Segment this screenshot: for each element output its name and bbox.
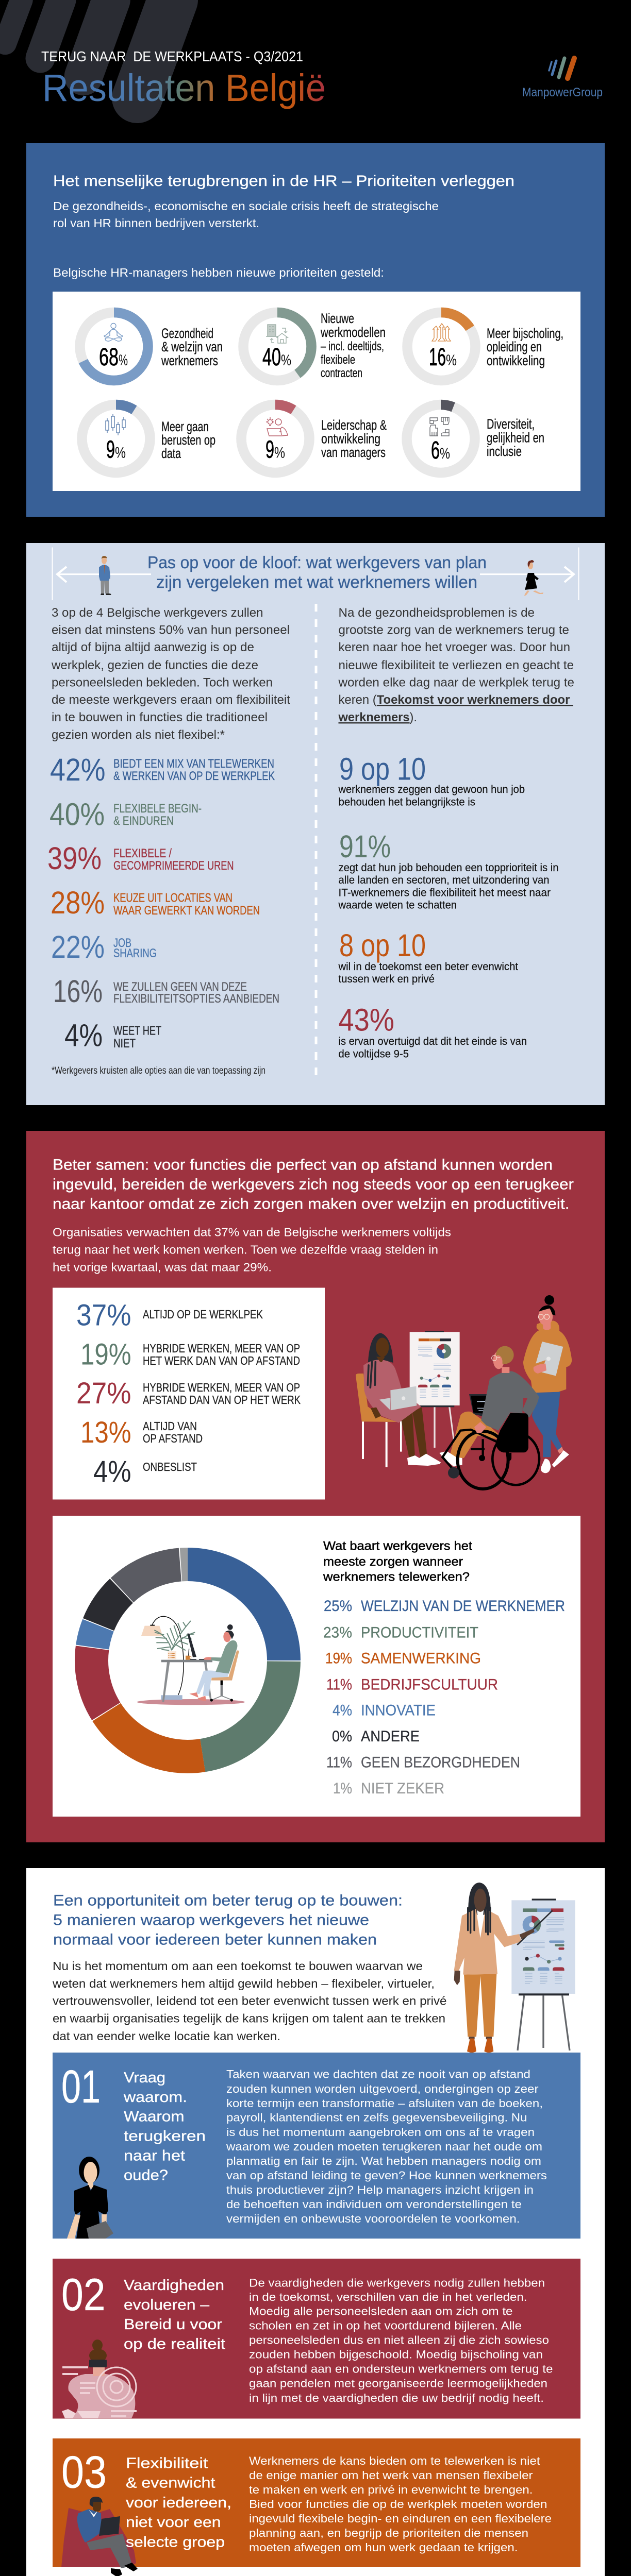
label: diversiteit: inclusie: [487, 444, 522, 459]
card heading: evolueren –: [124, 2297, 210, 2313]
label: leiderschap: van managers: [321, 445, 386, 460]
text: werknemers: worden elke dag naar de werkplek terug te: [338, 676, 574, 689]
stat: 43%: is ervan overtuigd dat dit het einde is van: [338, 1036, 527, 1047]
legend: 19%: [325, 1650, 352, 1667]
card body: gaan pendelen met georganiseerde leermogelijkheden: [249, 2377, 547, 2389]
intro text: rol van HR binnen bedrijven versterkt.: [53, 216, 259, 230]
stat: 40%: 40%: [49, 796, 105, 832]
illustration: team meeting: [356, 1295, 572, 1489]
legend: 11%: [326, 1676, 352, 1693]
card body: van op afstand leiding te geven? Hoe kunnen werknemers: [226, 2169, 547, 2182]
legend: PRODUCTIVITEIT: [361, 1624, 478, 1641]
text: werknemers: [338, 606, 574, 724]
text: werknemers: Na de gezondheidsproblemen is de: [338, 606, 535, 620]
label: nieuwe werkmodellen: werkmodellen: [320, 325, 386, 340]
text: werkgevers: personeelsleden bekleden. Toch werken: [52, 676, 273, 689]
card body: [249, 2276, 553, 2404]
header: [0, 0, 603, 109]
row: 27%: 27%: [76, 1377, 131, 1410]
row: 19%: HYBRIDE WERKEN, MEER VAN OP: [143, 1342, 300, 1355]
donut: 40%: %: [281, 352, 291, 369]
donut: 40%: 40: [262, 344, 281, 371]
stat: 40%: & EINDUREN: [113, 814, 174, 828]
stat: 39%: [47, 841, 234, 876]
card body: payroll, klantendienst en zelfs gegevensbeveiliging. Nu: [226, 2111, 527, 2124]
intro text: en waarbij organisaties tegelijk de kans krijgen om talent aan te trekken: [53, 2011, 445, 2025]
text: werknemers: keren naar hoe het vroeger was. Door hun: [338, 640, 570, 654]
flip chart: [410, 1331, 460, 1448]
legend: SAMENWERKING: [361, 1650, 481, 1667]
stat: 9 op 10: 9 op 10: [339, 751, 426, 786]
row: 37%: [76, 1298, 263, 1332]
stat: 8 op 10: 8 op 10: [339, 928, 426, 963]
stat: 91%: alle landen en sectoren, met uitzondering van: [338, 874, 550, 886]
row: 19%: 19%: [80, 1337, 131, 1371]
label: gezondheid: & welzijn van: [161, 339, 223, 354]
text: werknemers: nieuwe flexibiliteit te verliezen en geacht te: [338, 658, 574, 672]
figure: woman with VR headset: [62, 2340, 137, 2418]
label: bijscholing: ontwikkeling: [487, 353, 545, 368]
label: leiderschap: [321, 417, 387, 460]
card heading: waarom.: [123, 2089, 187, 2106]
legend: 25%: [324, 1598, 352, 1615]
stat list: flexibiliteit: [47, 752, 279, 1053]
label: data: Meer gaan: [161, 419, 209, 434]
row: 4%: 4%: [93, 1455, 131, 1488]
panel: beter samen: [26, 1131, 605, 1842]
stat: 4%: WEET HET: [113, 1024, 161, 1038]
stat: 40%: [49, 796, 202, 832]
card heading: Vraag: [124, 2070, 165, 2086]
heading: ingevuld, bereiden de werkgevers zich nog steeds voor op een terugkeer: [53, 1176, 574, 1193]
text: werkgevers: [51, 606, 290, 742]
card body: [226, 2068, 547, 2225]
card body: korte termijn een transformatie – afsluiten van de boeken,: [226, 2097, 543, 2110]
stat: 28%: 28%: [51, 885, 105, 920]
card body: Werknemers de kans bieden om te telewerken is niet: [249, 2454, 540, 2467]
donut: 16%: 16: [429, 344, 446, 371]
presentation board: [511, 1899, 575, 2050]
donut: 68%: %: [119, 352, 128, 369]
heading: [53, 1892, 403, 1948]
card heading: & evenwicht: [126, 2475, 215, 2492]
stat: 4%: NIET: [113, 1037, 136, 1050]
intro text: Organisaties verwachten dat 37% van de Belgische werknemers voltijds: [53, 1225, 451, 1239]
label: data: data: [161, 446, 181, 461]
card heading: Vaardigheden: [124, 2277, 224, 2294]
logo: ManpowerGroup: [522, 58, 603, 99]
donut: 40%: [243, 312, 311, 380]
legend: 11%: [326, 1754, 352, 1771]
intro text: [53, 199, 439, 230]
stat: 16%: 16%: [53, 974, 103, 1009]
heading: Het menselijke terugbrengen in de HR – Prioriteiten verleggen: [53, 173, 514, 190]
card heading: [124, 2277, 225, 2352]
donut: 6%: %: [440, 445, 450, 462]
card body: De vaardigheden die werkgevers nodig zullen hebben: [249, 2276, 545, 2290]
number: 03: [61, 2446, 107, 2498]
stat: 22%: SHARING: [113, 946, 157, 960]
label: gezondheid: Gezondheid: [161, 326, 213, 341]
donut: 9% data: 9: [106, 436, 115, 464]
text: werkgevers: werkplek, gezien de functies die deze: [51, 658, 258, 672]
card body: personeelsleden dus en niet alleen zij die zich sowieso: [249, 2334, 549, 2346]
card heading: [126, 2455, 231, 2550]
donut chart: [52, 1524, 324, 1797]
label: data: berusten op: [161, 432, 215, 448]
text: werkgevers: de meeste werkgevers eraan om flexibiliteit: [52, 693, 290, 707]
card heading: oude?: [124, 2167, 168, 2183]
stat: 91%: [338, 829, 559, 911]
stat: 91%: 91%: [339, 829, 391, 864]
stat: 39%: 39%: [47, 841, 102, 876]
card body: moeten afwegen om hun werk gedaan te krijgen.: [249, 2541, 518, 2554]
person: presenter: [454, 1883, 553, 2053]
title: Pas op voor de kloof: wat werkgevers van plan: [147, 553, 487, 572]
card 03: [53, 2438, 580, 2576]
card 02: [53, 2259, 580, 2418]
row: 13%: ALTIJD VAN: [143, 1419, 197, 1433]
card body: de behoeften van individuen om veronderstellingen te: [226, 2198, 522, 2211]
lead-in text: Belgische HR-managers hebben nieuwe prioriteiten gesteld:: [53, 266, 384, 279]
legend: INNOVATIE: [361, 1702, 436, 1719]
card body: zouden kunnen worden uitgevoerd, ondergingen op zeer: [226, 2082, 538, 2095]
legend: 1%: [333, 1780, 352, 1797]
card heading: niet voor een: [126, 2514, 221, 2531]
number: 02: [61, 2269, 105, 2320]
label: gezondheid: [161, 326, 223, 368]
panel: de kloof: [26, 543, 605, 1105]
heading: normaal voor iedereen beter kunnen maken: [53, 1931, 377, 1948]
title: zijn vergeleken met wat werknemers willen: [156, 572, 477, 591]
intro text: De gezondheids-, economische en sociale crisis heeft de strategische: [53, 199, 439, 213]
legend: NIET ZEKER: [361, 1780, 444, 1797]
label: nieuwe werkmodellen: Nieuwe: [321, 311, 354, 326]
label: bijscholing: opleiding en: [487, 339, 542, 354]
figure: man: [99, 556, 111, 595]
legend heading: Wat baart werkgevers het: [323, 1539, 472, 1553]
donut: 6%: [407, 405, 475, 473]
stat: 40%: FLEXIBELE BEGIN-: [113, 802, 202, 816]
intro text: [52, 1959, 447, 2043]
stat: 43%: de voltijdse 9-5: [338, 1048, 409, 1060]
legend: BEDRIJFSCULTUUR: [361, 1676, 498, 1693]
chair: [356, 1374, 402, 1467]
card body: vermijden en onbewuste vooroordelen te voorkomen.: [226, 2212, 520, 2225]
stat: 28%: KEUZE UIT LOCATIES VAN: [113, 891, 233, 905]
person: man in wheelchair: [439, 1346, 539, 1489]
stat: 28%: WAAR GEWERKT KAN WORDEN: [113, 904, 260, 918]
card heading: Flexibiliteit: [126, 2455, 208, 2472]
card: zorgen bij telewerken: [52, 1516, 580, 1817]
text: werkgevers: in te bouwen in functies die traditioneel: [52, 710, 268, 724]
panel: opportuniteit: [26, 1868, 605, 2576]
row: 37%: 37%: [76, 1298, 131, 1332]
card body: planning aan, en begrijp de prioriteiten die mensen: [249, 2527, 528, 2539]
label: nieuwe werkmodellen: [320, 311, 386, 380]
label: data: [161, 419, 215, 461]
row: 19%: [80, 1337, 300, 1371]
card body: in lijn met de vaardigheden die uw bedrijf nodig heeft.: [249, 2392, 544, 2404]
footnote: *Werkgevers kruisten alle opties aan die van toepassing zijn: [52, 1065, 265, 1076]
label: diversiteit: Diversiteit,: [487, 416, 535, 432]
stat: 91%: waarde weten te schatten: [338, 900, 457, 911]
text: werknemers: grootste zorg van de werknemers terug te: [338, 623, 569, 637]
stat: 22%: JOB: [113, 936, 131, 950]
label: nieuwe werkmodellen: flexibele: [321, 353, 355, 367]
label: leiderschap: Leiderschap &: [321, 417, 387, 433]
main title: Resultaten België: [42, 66, 326, 109]
label: bijscholing: [487, 326, 563, 368]
label: gezondheid: werknemers: [161, 353, 218, 368]
stat: 9 op 10: werknemers zeggen dat gewoon hun job: [338, 784, 525, 795]
card heading: op de realiteit: [124, 2336, 225, 2352]
title: [147, 553, 487, 591]
card body: is dus het momentum aangebroken om ons af te vragen: [226, 2126, 535, 2139]
intro text: Nu is het momentum om aan een toekomst te bouwen waarvan we: [53, 1959, 423, 1973]
legend: WELZIJN VAN DE WERKNEMER: [361, 1598, 565, 1615]
card 01: [53, 2053, 580, 2239]
legend: ANDERE: [361, 1728, 420, 1745]
donut: 9% leiderschap: %: [274, 444, 285, 462]
row: 13%: [80, 1416, 203, 1449]
legend: GEEN BEZORGDHEDEN: [361, 1754, 520, 1771]
stat: 42%: & WERKEN VAN OP DE WERKPLEK: [113, 769, 275, 783]
card body: ingevuld flexibele begin- en einduren en een flexibelere: [249, 2512, 552, 2525]
stat: 43%: [338, 1003, 527, 1060]
donut: 9% leiderschap: 9: [265, 436, 274, 464]
label: nieuwe werkmodellen: – incl. deeltijds,: [321, 340, 384, 353]
legend: 23%: [323, 1624, 352, 1641]
donut: 68%: 68: [99, 344, 119, 371]
stat: 42%: [50, 752, 275, 787]
card body: zouden hebben bijgeschoold. Moedig bijscholing van: [249, 2348, 543, 2361]
row: 4%: ONBESLIST: [143, 1460, 197, 1473]
row: 27%: HYBRIDE WERKEN, MEER VAN OP: [143, 1381, 300, 1394]
intro text: vertrouwensvoller, leidend tot een beter evenwicht tussen werk en privé: [53, 1994, 446, 2007]
label: nieuwe werkmodellen: contracten: [321, 366, 362, 380]
stat: 8 op 10: wil in de toekomst een beter evenwicht: [338, 961, 518, 973]
card body: de enige manier om het werk van mensen flexibeler: [249, 2469, 533, 2482]
card body: planmatig en fair te zijn. Wat hebben managers nodig om: [226, 2155, 541, 2167]
stat: 39%: GECOMPRIMEERDE UREN: [113, 859, 234, 873]
stat: 91%: IT-werknemers die flexibiliteit het meest naar: [338, 887, 551, 899]
card heading: selecte groep: [126, 2534, 225, 2550]
text: werkgevers: eisen dat minstens 50% van hun personeel: [52, 623, 290, 637]
donut: 6%: 6: [431, 437, 440, 464]
text: werkgevers: 3 op de 4 Belgische werkgevers zullen: [52, 606, 263, 620]
row: 13%: 13%: [80, 1416, 131, 1449]
stat: 4%: [64, 1018, 161, 1053]
stat: 16%: FLEXIBILITEITSOPTIES AANBIEDEN: [113, 992, 279, 1006]
card body: Moedig alle personeelsleden aan om zich om te: [249, 2305, 512, 2317]
legend: 0%: [332, 1728, 352, 1745]
card heading: naar het: [124, 2147, 185, 2164]
white card with donuts: [53, 292, 580, 491]
text: werkgevers: altijd of bijna altijd aanwezig is op de: [52, 640, 254, 654]
card body: in de toekomst, verschillen van die in het verleden.: [249, 2291, 527, 2303]
stat: 28%: [51, 885, 260, 920]
donut: 16%: %: [446, 352, 457, 369]
card body: thuis productiever zijn? Help managers inzicht krijgen in: [226, 2183, 534, 2196]
card heading: voor iedereen,: [126, 2495, 231, 2511]
card body: op afstand aan en ondersteun werknemers om terug te: [249, 2363, 553, 2375]
heading: 5 manieren waarop werkgevers het nieuwe: [53, 1911, 369, 1929]
stat: 16%: WE ZULLEN GEEN VAN DEZE: [113, 980, 247, 994]
row: 4%: [93, 1455, 197, 1488]
header arrows: [53, 547, 578, 600]
heading: Een opportuniteit om beter terug op te bouwen:: [53, 1892, 403, 1909]
person: woman with laptop: [363, 1333, 441, 1466]
legend: 4%: [333, 1702, 352, 1719]
header kicker: TERUG NAAR DE WERKPLAATS - Q3/2021: [41, 48, 303, 64]
card body: waarom we zouden moeten terugkeren naar het oude om: [226, 2140, 542, 2153]
card body: Taken waarvan we dachten dat ze nooit van op afstand: [226, 2068, 530, 2080]
card heading: terugkeren: [124, 2128, 206, 2144]
stat: 8 op 10: [338, 928, 518, 985]
stat: 9 op 10: [338, 751, 525, 808]
stat: 91%: zegt dat hun job behouden een topprioriteit is in: [338, 862, 559, 874]
donut: 16%: [407, 312, 475, 380]
logo: ManpowerGroup: ManpowerGroup: [522, 86, 603, 99]
stat: 9 op 10: behouden het belangrijkste is: [338, 796, 475, 808]
label: leiderschap: ontwikkeling: [321, 431, 380, 446]
figure: running woman: [524, 560, 543, 596]
text: werkgevers: gezien worden als niet flexibel:*: [52, 728, 225, 742]
row: 19%: HET WERK DAN VAN OP AFSTAND: [143, 1354, 300, 1367]
intro text: terug naar het werk komen werken. Toen we dezelfde vraag stelden in: [53, 1243, 438, 1256]
card: verwachtingen: [53, 1288, 325, 1499]
donut: 68%: [80, 312, 148, 380]
card body: te maken en werk en privé in evenwicht te brengen.: [249, 2483, 533, 2496]
number: 01: [61, 2061, 101, 2113]
decorative diagonal stripes: [0, 0, 206, 98]
illustration: woman at desk: [137, 1616, 245, 1705]
stat: 42%: BIEDT EEN MIX VAN TELEWERKEN: [113, 757, 274, 771]
text: werknemers: keren (Toekomst voor werknemers door: [338, 693, 573, 707]
stat: 4%: 4%: [64, 1018, 103, 1053]
row: 27%: AFSTAND DAN VAN OP HET WERK: [143, 1393, 301, 1406]
donut: 9% leiderschap: [241, 405, 309, 473]
panel: prioriteiten: [26, 143, 605, 517]
card heading: [123, 2070, 206, 2183]
card heading: Waarom: [124, 2108, 185, 2125]
stat: 8 op 10: tussen werk en privé: [338, 973, 435, 985]
person: woman standing: [523, 1295, 572, 1473]
legend: [323, 1598, 565, 1797]
intro text: dat van eender welke locatie kan werken.: [53, 2029, 280, 2043]
stat: 22%: [51, 929, 157, 964]
donut: 9% data: [82, 405, 150, 473]
legend heading: [323, 1539, 472, 1584]
card body: Bied voor functies die op de werkplek moeten worden: [249, 2498, 547, 2511]
figure: man on beanbag: [61, 2497, 138, 2576]
legend heading: meeste zorgen wanneer: [323, 1555, 463, 1569]
row: 37%: ALTIJD OP DE WERKLPEK: [143, 1308, 263, 1321]
heading: Beter samen: voor functies die perfect van op afstand kunnen worden: [53, 1156, 553, 1174]
heading: naar kantoor omdat ze zich zorgen maken over welzijn en productitiveit.: [53, 1195, 569, 1213]
stat: 16%: [53, 974, 279, 1009]
legend heading: werknemers telewerken?: [323, 1570, 470, 1584]
label: bijscholing: Meer bijscholing,: [487, 326, 563, 341]
label: diversiteit: gelijkheid en: [487, 430, 544, 445]
card body: scholen en zet in op het voortdurend bijleren. Alle: [249, 2319, 522, 2332]
card heading: Bereid u voor: [124, 2316, 222, 2333]
card body: [249, 2454, 552, 2554]
stat: 42%: 42%: [50, 752, 105, 787]
intro text: het vorige kwartaal, was dat maar 29%.: [53, 1260, 272, 1274]
heading: [53, 1156, 574, 1213]
intro text: weten dat werknemers hem altijd gewild hebben – flexibeler, virtueler,: [52, 1977, 435, 1990]
figure: woman with bag: [67, 2157, 113, 2239]
stat: 43%: 43%: [338, 1003, 394, 1038]
illustration: presenter: [454, 1883, 575, 2053]
stat: 39%: FLEXIBELE /: [113, 846, 172, 860]
row: 27%: [76, 1377, 301, 1410]
stat: 22%: 22%: [51, 929, 105, 964]
donut: 9% data: %: [115, 444, 126, 462]
text: werknemers: werknemers).: [338, 710, 417, 724]
intro text: [53, 1225, 451, 1274]
row: 13%: OP AFSTAND: [143, 1432, 203, 1445]
label: diversiteit: [487, 416, 544, 459]
